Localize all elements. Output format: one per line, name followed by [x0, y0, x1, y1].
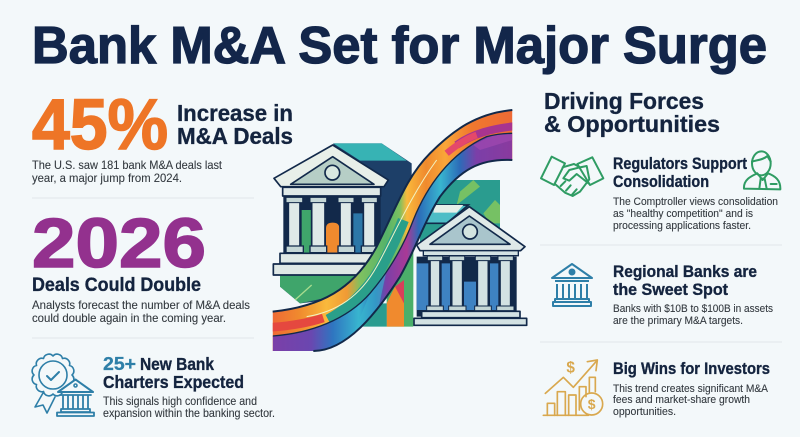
text block: fees and share growth: This trend creates significant M&A	[613, 383, 769, 395]
title: Bank M&A Set for Major Surge	[32, 17, 767, 75]
heading: regional banks are the sweet spot: the Sweet Spot	[613, 280, 728, 299]
rainbow ribbon	[270, 107, 517, 353]
heading: driving forces and opportunities: Driving Forces	[544, 88, 704, 114]
text block: fees and share growth: fees and market-share growth	[613, 394, 750, 406]
heading: increase in M&A deals: Increase in	[177, 100, 293, 126]
heading: regulators support consolidation	[613, 155, 747, 191]
text block: 181 deals: The U.S. saw 181 bank M&A deals last	[32, 158, 223, 172]
heading: 25+ new bank charters	[103, 354, 244, 392]
heading: regulators support consolidation: Regulators Support	[613, 155, 747, 173]
right bank building	[414, 207, 527, 325]
text block: asset range: Banks with $10B to $100B in assets	[613, 303, 773, 315]
text block: high confidence	[103, 394, 275, 420]
icon: growth chart with coins	[543, 360, 603, 415]
heading: 25+ new bank charters: Charters Expected	[103, 372, 244, 392]
heading: driving forces and opportunities	[544, 88, 720, 137]
icon: official in suit	[744, 151, 780, 189]
icon: growth chart with coins: $	[566, 360, 575, 377]
panel: 2026 forecast	[32, 204, 250, 325]
heading: regional banks are the sweet spot	[613, 262, 757, 299]
big number: 45%: 45%	[32, 86, 168, 165]
left bank backdrop	[280, 143, 412, 303]
text block: 181 deals	[32, 158, 223, 185]
heading: big wins for investors: Big Wins for Investors	[613, 359, 770, 378]
heading: deals could double: Deals Could Double	[32, 274, 201, 296]
text block: analysts forecast: Analysts forecast the number of M&A deals	[32, 298, 250, 312]
text block: analysts forecast	[32, 298, 250, 325]
icon: bank	[552, 264, 592, 306]
panel: new bank charters	[32, 354, 275, 420]
text block: analysts forecast: could double again in the coming year.	[32, 311, 226, 325]
text block: comptroller: processing applications faster.	[613, 220, 751, 232]
text block: comptroller: The Comptroller views consolidation	[613, 196, 778, 208]
big number: 2026: 2026	[32, 204, 206, 282]
text block: high confidence: This signals high confidence and	[103, 394, 257, 408]
text block: asset range	[613, 303, 773, 327]
heading: increase in M&A deals	[177, 100, 293, 149]
text block: 181 deals: year, a major jump from 2024.	[32, 171, 182, 185]
heading: increase in M&A deals: M&A Deals	[177, 123, 293, 149]
heading: driving forces and opportunities: & Opportunities	[544, 111, 720, 137]
heading: 25+ new bank charters: New Bank	[140, 354, 214, 374]
icon: growth chart with coins: $	[588, 396, 596, 412]
text block: fees and share growth	[613, 383, 769, 418]
central illustration: two banks joined by rainbow ribbon	[270, 107, 527, 353]
panel: regional banks	[552, 262, 773, 327]
left bank building	[273, 145, 388, 275]
icon: handshake	[541, 157, 603, 196]
right bank backdrop	[360, 180, 517, 327]
heading: regulators support consolidation: Consolidation	[613, 173, 709, 191]
text block: asset range: are the primary M&A targets.	[613, 315, 743, 327]
heading: 25+ new bank charters: 25+	[103, 354, 136, 374]
text block: comptroller: as "healthy competition" and is	[613, 208, 753, 220]
panel: regulators support consolidation	[541, 151, 780, 232]
panel: 45% increase stat	[32, 86, 293, 185]
text block: high confidence: expansion within the banking sector.	[103, 406, 275, 420]
heading: regional banks are the sweet spot: Regional Banks are	[613, 262, 757, 281]
panel: big wins for investors	[543, 359, 770, 418]
icon: rosette and bank	[32, 354, 94, 416]
text block: fees and share growth: opportunities.	[613, 406, 676, 418]
text block: comptroller	[613, 196, 778, 232]
